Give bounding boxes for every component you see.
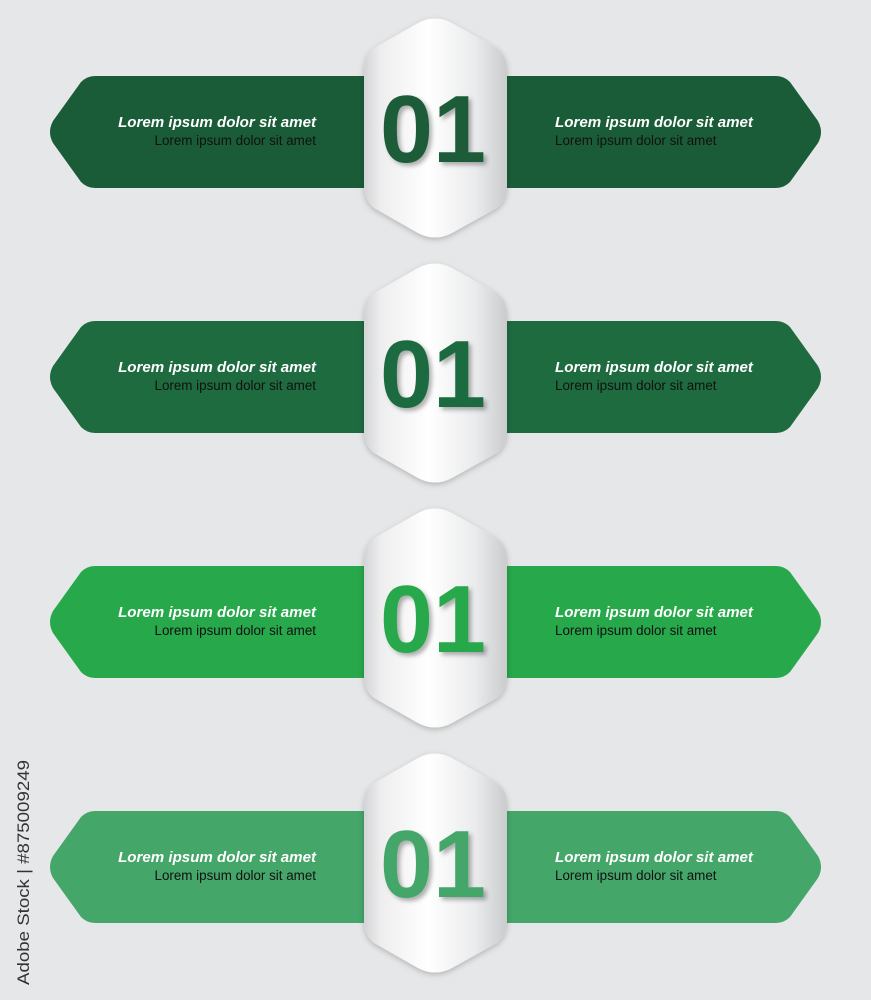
left text <box>118 359 317 393</box>
badge: 01 <box>380 321 486 428</box>
bar <box>50 76 821 188</box>
left text: Lorem ipsum dolor sit amet <box>154 378 316 393</box>
right text: Lorem ipsum dolor sit amet <box>555 849 754 866</box>
bar <box>50 811 821 923</box>
badge <box>364 18 507 238</box>
row 2 <box>50 264 821 482</box>
left text: Lorem ipsum dolor sit amet <box>154 133 316 148</box>
left text <box>118 604 317 638</box>
row 1 <box>50 18 821 238</box>
right text <box>555 849 754 883</box>
badge <box>364 754 507 972</box>
right text <box>555 359 754 393</box>
right text <box>555 114 754 148</box>
right text: Lorem ipsum dolor sit amet <box>555 604 754 621</box>
badge <box>364 264 507 482</box>
badge: 01 <box>380 566 486 673</box>
badge: 01 <box>380 76 486 183</box>
left text: Lorem ipsum dolor sit amet <box>118 359 317 376</box>
left text: Lorem ipsum dolor sit amet <box>118 114 317 131</box>
row 4 <box>50 754 821 972</box>
right text: Lorem ipsum dolor sit amet <box>555 378 717 393</box>
left text <box>118 849 317 883</box>
badge <box>364 508 507 728</box>
right text: Lorem ipsum dolor sit amet <box>555 114 754 131</box>
right text: Lorem ipsum dolor sit amet <box>555 623 717 638</box>
right text <box>555 604 754 638</box>
left text: Lorem ipsum dolor sit amet <box>118 604 317 621</box>
left text <box>118 114 317 148</box>
bar <box>50 321 821 433</box>
watermark text: Adobe Stock | #875009249 <box>14 760 33 985</box>
left text: Lorem ipsum dolor sit amet <box>154 623 316 638</box>
badge: 01 <box>380 811 486 918</box>
right text: Lorem ipsum dolor sit amet <box>555 359 754 376</box>
left text: Lorem ipsum dolor sit amet <box>118 849 317 866</box>
right text: Lorem ipsum dolor sit amet <box>555 868 717 883</box>
bar <box>50 566 821 678</box>
right text: Lorem ipsum dolor sit amet <box>555 133 717 148</box>
row 3 <box>50 508 821 728</box>
left text: Lorem ipsum dolor sit amet <box>154 868 316 883</box>
